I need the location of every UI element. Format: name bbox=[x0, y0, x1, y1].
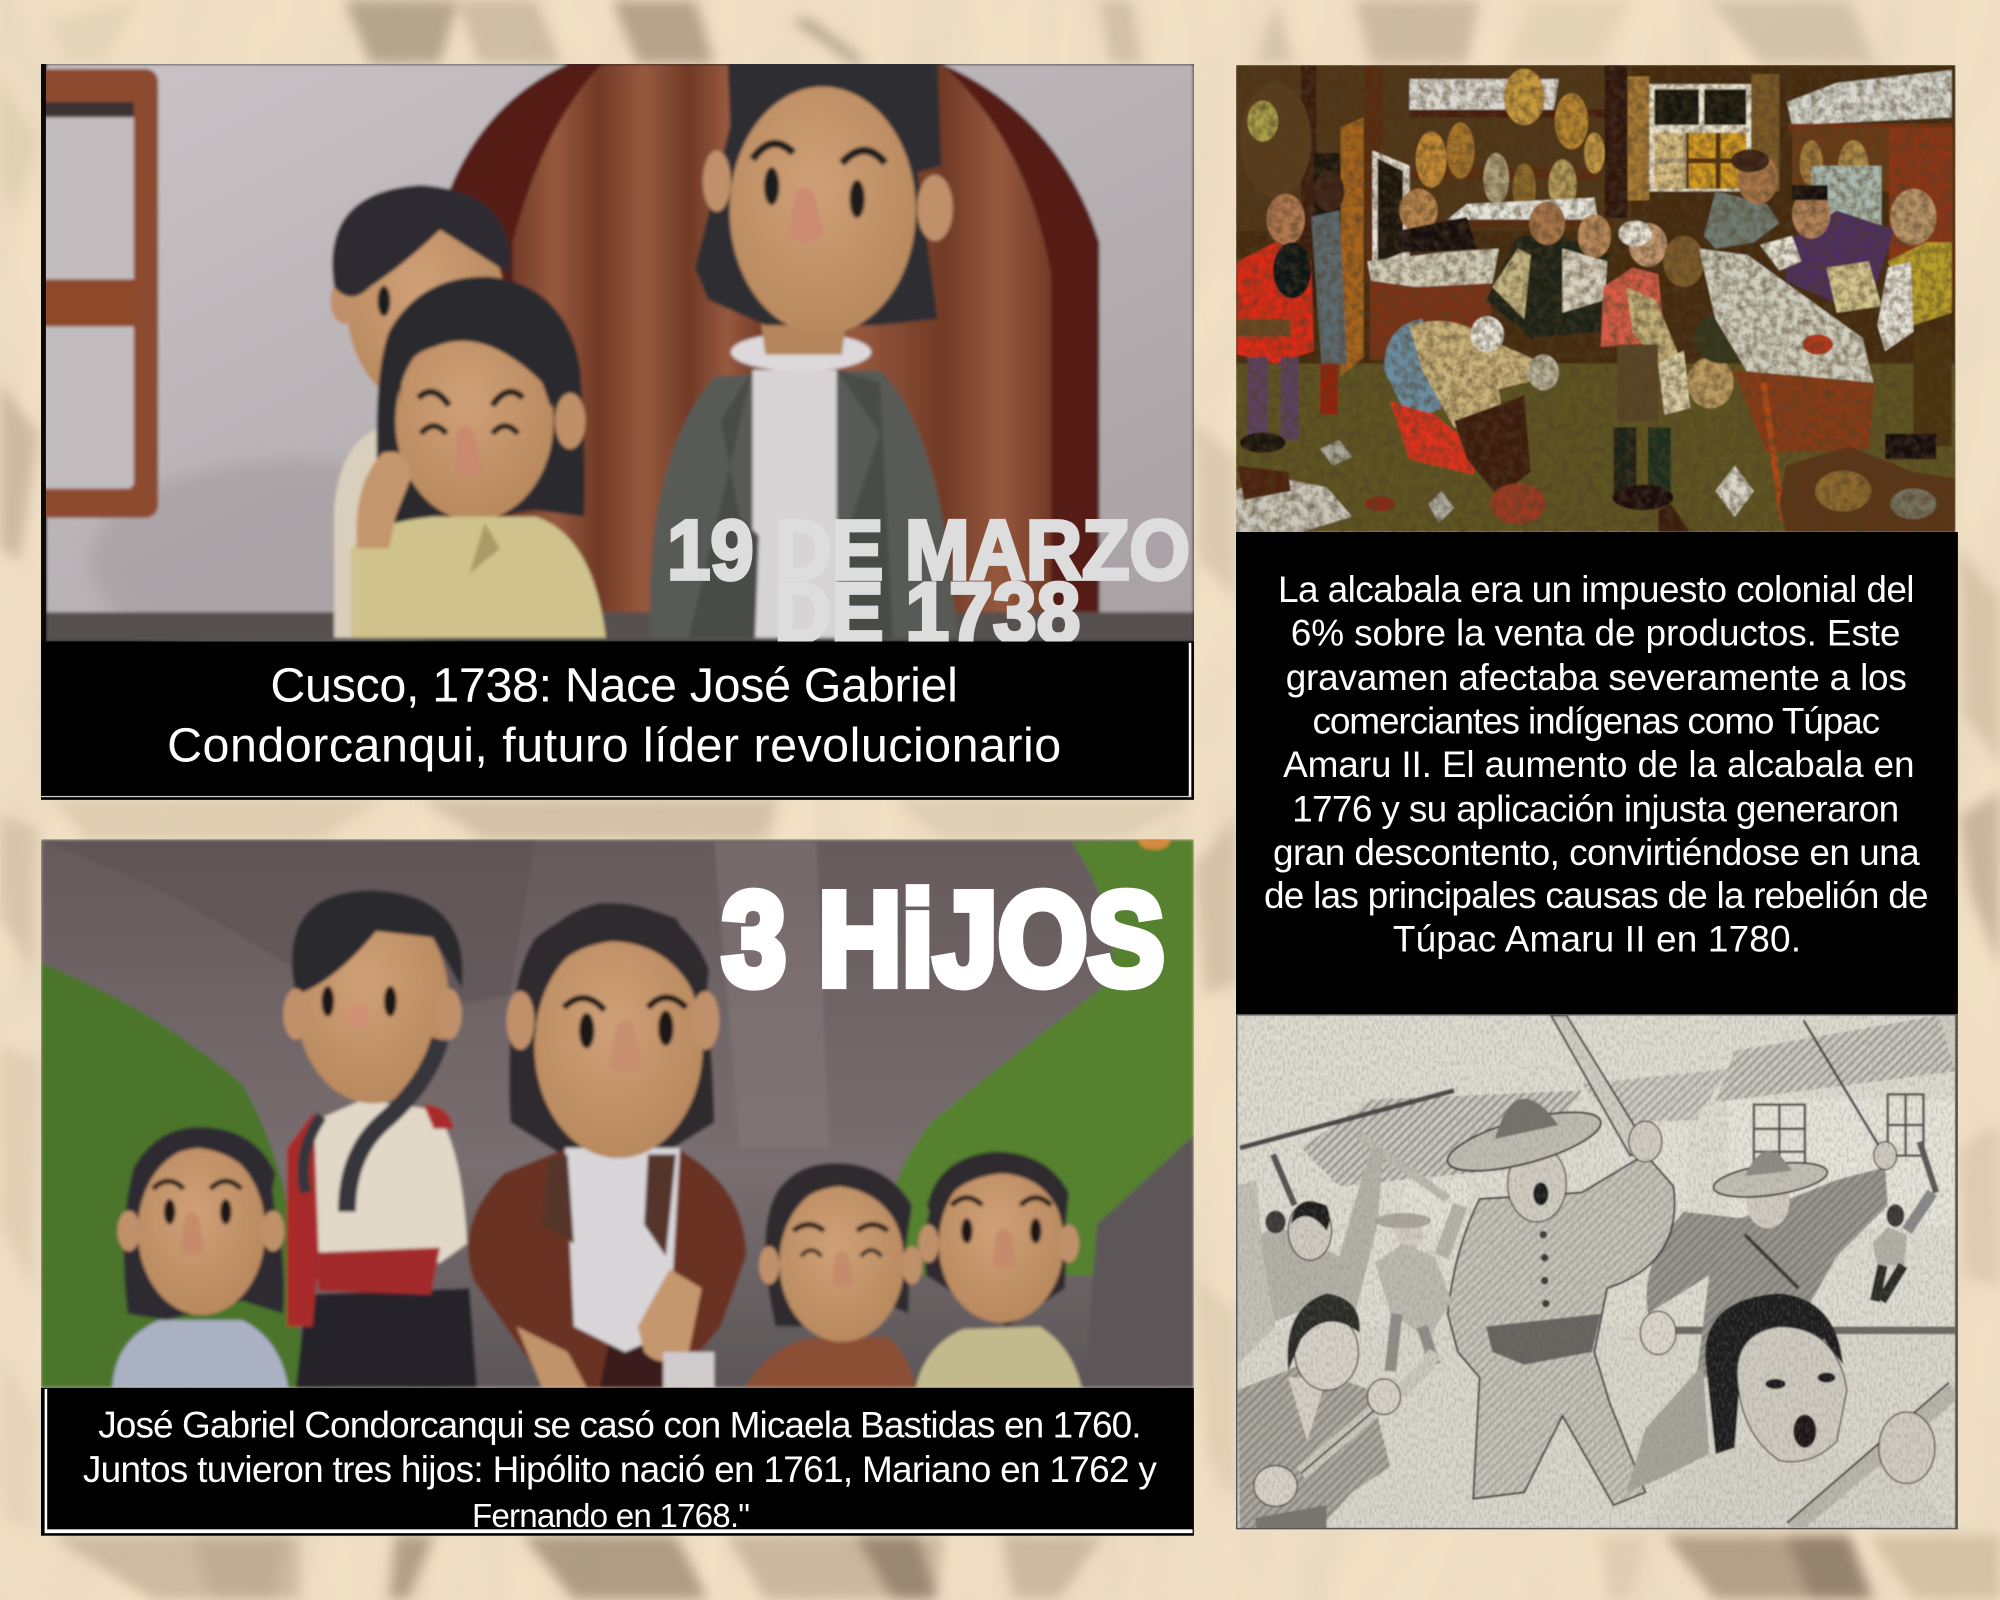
father bbox=[468, 903, 746, 1388]
caption: marriage and children: Juntos tuvieron tres hijos: Hipólito nació en 1761, Mariano en 1762 y bbox=[83, 1449, 1157, 1490]
panel: text about the alcabala tax: gravamen afectaba severamente a los bbox=[1286, 657, 1907, 698]
desk and clerk bbox=[1370, 281, 1491, 360]
panel: text about the alcabala tax: comerciantes indígenas como Túpac bbox=[1312, 700, 1880, 741]
caption: marriage and children: José Gabriel Condorcanqui se casó con Micaela Bastidas en 1760. bbox=[98, 1404, 1142, 1445]
panel: painting of the tax office bbox=[1236, 65, 1955, 532]
top right papers and wood bbox=[1787, 70, 1952, 125]
girl in front bbox=[351, 277, 606, 638]
far right small runner bbox=[1872, 1142, 1936, 1301]
panel: text about the alcabala tax: 6% sobre la venta de productos. Este bbox=[1291, 612, 1901, 653]
panel: text about the alcabala tax: 1776 y su aplicación injusta generaron bbox=[1292, 788, 1899, 829]
arched door bbox=[449, 64, 1099, 612]
man in the doorway bbox=[1311, 210, 1347, 364]
scene: family portrait bbox=[41, 834, 1194, 1388]
front shouting man bbox=[1626, 1293, 1955, 1528]
panel backing bbox=[41, 64, 1194, 800]
panel: text about the alcabala tax: La alcabala era un impuesto colonial del bbox=[1278, 569, 1915, 610]
wooden window frame bbox=[46, 66, 160, 520]
panel: pencil drawing of the rebellion bbox=[1236, 1014, 1958, 1529]
woman bending bbox=[1384, 319, 1441, 421]
panel: text about the alcabala tax: Túpac Amaru II en 1780. bbox=[1393, 919, 1801, 960]
wall papers and bags bbox=[1409, 79, 1559, 110]
bottom left man with club bbox=[1237, 1293, 1435, 1528]
man with grey jacket bbox=[650, 51, 957, 638]
panel: text about the alcabala tax: gran descontento, convirtiéndose en una bbox=[1273, 832, 1920, 873]
table with papers bbox=[1699, 249, 1875, 389]
child left bbox=[112, 1127, 288, 1388]
caption: Cusco 1738: Condorcanqui, futuro líder revolucionario bbox=[167, 718, 1061, 772]
caption: Cusco 1738: Cusco, 1738: Nace José Gabriel bbox=[270, 659, 958, 713]
caption: marriage and children: Fernando en 1768." bbox=[472, 1498, 750, 1535]
overlay text: 3 hijos: 3 HiJOS bbox=[722, 866, 1165, 1014]
men behind the table bbox=[1704, 191, 1779, 249]
caption: marriage and children bbox=[41, 1388, 1194, 1536]
woman behind bbox=[330, 185, 511, 638]
overlay date text bbox=[670, 518, 1188, 642]
right man with hat bbox=[1640, 1020, 1897, 1378]
main window and shutters bbox=[1649, 84, 1751, 191]
mother bbox=[283, 890, 477, 1388]
panel: text about the alcabala tax bbox=[1236, 532, 1958, 1014]
standing man in red bbox=[1237, 242, 1314, 364]
panel: text about the alcabala tax: Amaru II. El aumento de la alcabala en bbox=[1283, 744, 1915, 785]
caption: Cusco 1738 bbox=[41, 642, 1194, 800]
buildings bbox=[1237, 1015, 1955, 1528]
central man with sword bbox=[1442, 1015, 1675, 1505]
overlay date text: 19 DE MARZO bbox=[667, 503, 1190, 597]
panel: family, three children bbox=[41, 834, 1194, 1536]
scene: family at the door bbox=[26, 51, 1194, 663]
left group of rebels bbox=[1237, 1091, 1460, 1371]
floor rubble bbox=[1236, 474, 1352, 532]
middle men bbox=[1486, 236, 1610, 338]
child middle bbox=[745, 1163, 922, 1388]
old man with red vest bbox=[1601, 268, 1665, 347]
overlay date text: DE 1738 bbox=[774, 566, 1080, 660]
panel: birth in Cusco 1738 bbox=[26, 51, 1194, 800]
child right bbox=[916, 1152, 1082, 1388]
panel: text about the alcabala tax: de las principales causas de la rebelión de bbox=[1264, 875, 1929, 916]
door bbox=[1341, 117, 1364, 376]
small window bbox=[1372, 151, 1409, 274]
